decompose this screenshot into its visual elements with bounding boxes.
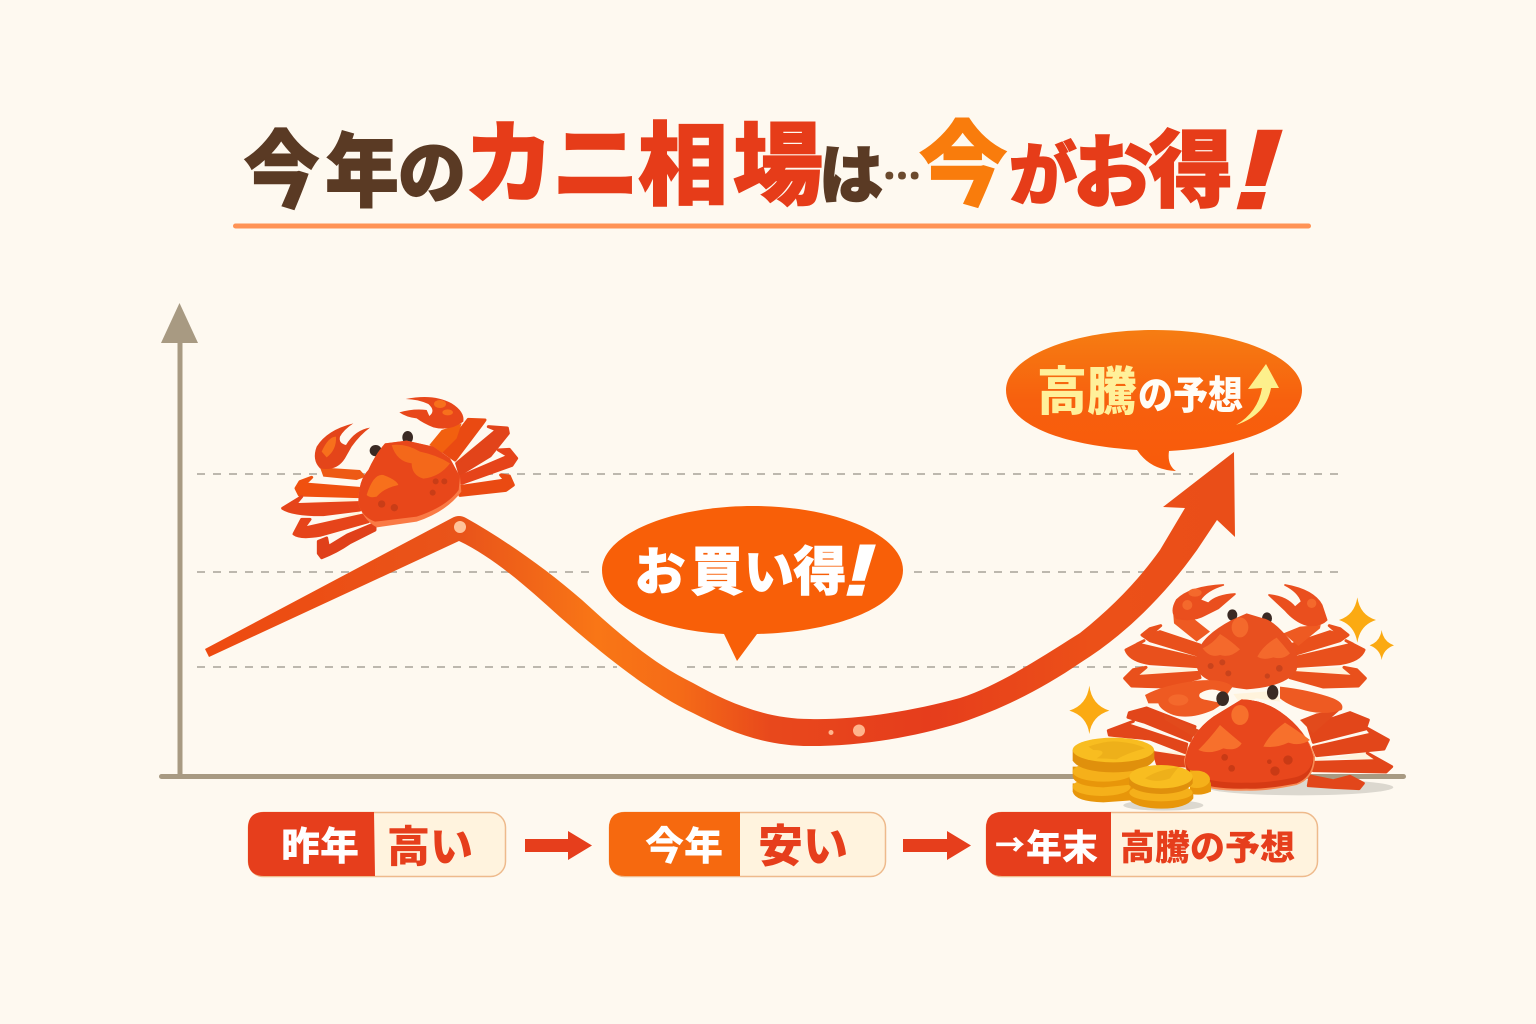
top crab claw right — [1269, 585, 1327, 646]
status pill: this year — [609, 810, 886, 876]
chart gridlines — [197, 474, 1340, 667]
title: が — [1009, 120, 1077, 219]
crab body — [358, 441, 461, 527]
front crab legs left — [1108, 708, 1195, 766]
top crab legs left — [1125, 626, 1200, 687]
title: 場 — [733, 93, 823, 223]
arrow — [903, 831, 971, 860]
crab pile with coins and sparkles — [1069, 585, 1394, 811]
left coin stack — [1073, 738, 1154, 802]
title: の — [398, 118, 466, 217]
sparkle left — [1069, 686, 1109, 734]
sparkle large — [1339, 597, 1376, 643]
bubble text: ! — [844, 531, 876, 611]
front crab — [1108, 680, 1392, 791]
status pill: this year: 今年 — [645, 816, 723, 872]
low point markers — [828, 724, 865, 736]
title: 年 — [325, 108, 399, 224]
crab leg gaps — [295, 430, 508, 547]
right coin stack — [1129, 765, 1211, 809]
status pill: this year: 安い — [758, 810, 848, 875]
bubble text — [634, 530, 876, 611]
x axis — [159, 774, 1406, 779]
status pill: last year: 昨年 — [281, 816, 359, 872]
status pill: year end — [986, 812, 1318, 876]
status pill: year end: 年末 — [1026, 819, 1098, 871]
front crab claw left — [1145, 680, 1233, 737]
front crab claw right — [1280, 687, 1342, 733]
bubble text: 買 — [690, 530, 744, 606]
status pill: year end: 高騰の予想 — [1120, 820, 1295, 871]
status pill: year end: → — [995, 821, 1025, 865]
title: 今 — [244, 104, 319, 226]
arrow — [525, 831, 592, 860]
bubble text: 高騰 — [1037, 350, 1137, 425]
title: 相 — [638, 93, 728, 223]
title: 得 — [1149, 104, 1233, 225]
title underline — [233, 224, 1311, 228]
bubble text: お — [634, 531, 686, 605]
title: カ — [464, 91, 554, 221]
crab eyes — [370, 431, 413, 456]
front crab body — [1184, 699, 1315, 791]
bubble text: い — [744, 533, 794, 605]
crab on last year's peak — [283, 397, 517, 558]
title: 今 — [919, 91, 1007, 225]
bubble text: 得 — [794, 530, 846, 606]
top crab claw left — [1173, 585, 1235, 642]
crab claw left — [315, 423, 370, 480]
coin stacks — [1073, 738, 1211, 809]
title — [244, 91, 1283, 232]
title: は — [819, 125, 883, 217]
icon: up arrow — [1236, 364, 1279, 425]
title: … — [883, 146, 921, 201]
top crab legs right — [1290, 626, 1365, 687]
front crab eyes — [1216, 685, 1278, 706]
crab legs — [283, 419, 517, 558]
speech bubble: good deal — [602, 506, 903, 661]
top crab body — [1196, 613, 1297, 689]
title: お — [1073, 109, 1153, 225]
front crab legs right — [1308, 713, 1392, 789]
crab claw right — [399, 397, 464, 453]
status pill: last year — [248, 812, 506, 876]
title: ! — [1233, 108, 1283, 232]
speech bubble: rising forecast — [1006, 330, 1302, 471]
top crab eyes — [1227, 609, 1272, 624]
bubble text — [1037, 350, 1243, 425]
coin shadow — [1123, 800, 1203, 811]
gap under eyes — [1233, 691, 1280, 703]
status pill: last year: 高い — [387, 813, 473, 875]
price trend arrow — [205, 452, 1235, 746]
sparkle small — [1370, 630, 1394, 660]
y axis with arrow — [161, 303, 198, 776]
bubble text: の予想 — [1138, 364, 1243, 421]
top crab — [1125, 585, 1365, 689]
title: ニ — [552, 94, 640, 221]
peak marker — [454, 521, 466, 533]
ground shadow — [1207, 779, 1393, 795]
